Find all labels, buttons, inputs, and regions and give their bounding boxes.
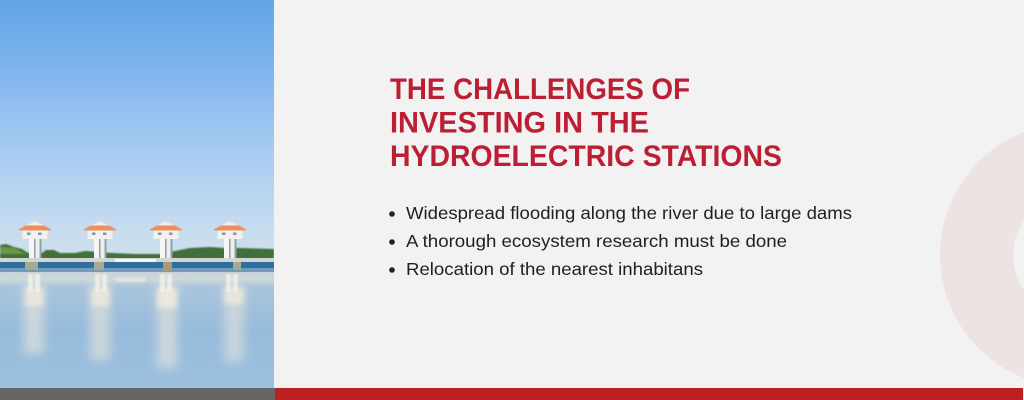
- water: [0, 270, 274, 388]
- tower 1: [18, 221, 52, 258]
- reflections, bright core: [25, 288, 244, 308]
- bridge deck: [0, 258, 274, 262]
- title: INVESTING IN THE: [390, 106, 649, 140]
- bullet item 1: Widespread flooding along the river due to large dams: [406, 203, 852, 223]
- decorative ring: [976, 160, 1024, 350]
- title: HYDROELECTRIC STATIONS: [390, 140, 782, 173]
- sky: [0, 0, 274, 258]
- tower 4: [214, 221, 246, 258]
- bottom bar: red: [275, 388, 1023, 400]
- treeline: [0, 244, 274, 259]
- tower 2: [84, 221, 116, 258]
- river wall: [0, 262, 274, 268]
- title: [390, 73, 782, 173]
- tower 3: [150, 221, 182, 258]
- bullet item 2: A thorough ecosystem research must be done: [406, 231, 787, 251]
- bullet list: [389, 203, 852, 279]
- reflections, wide haze: [24, 284, 244, 368]
- reflected columns: [28, 274, 238, 292]
- bullet item 3: Relocation of the nearest inhabitans: [406, 259, 703, 279]
- piers: [25, 262, 241, 271]
- bottom bar: grey: [0, 388, 275, 400]
- photo: dam towers on river: [0, 0, 274, 388]
- title: THE CHALLENGES OF: [390, 73, 690, 106]
